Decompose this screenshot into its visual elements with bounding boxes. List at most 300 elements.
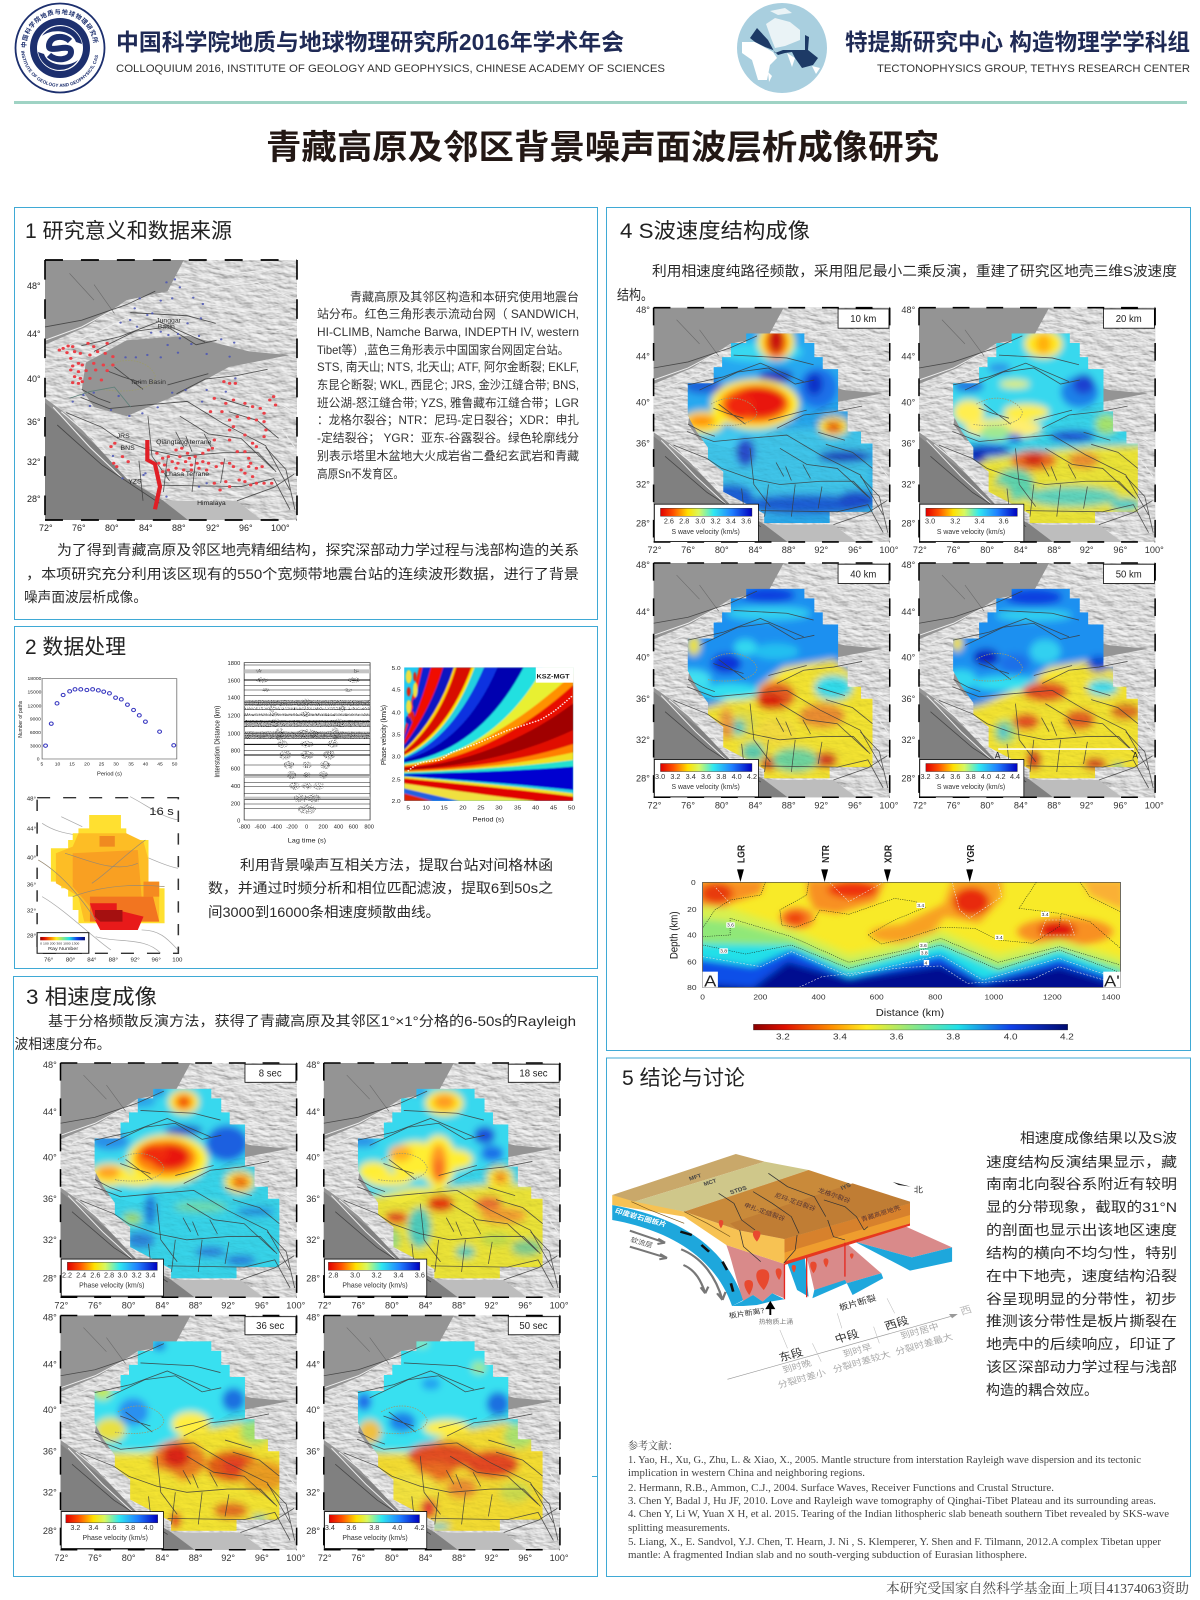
panel 3 heading: 3 相速度成像 (26, 986, 157, 1009)
path count scatter chart: 6000 (30, 730, 41, 735)
axis labels: 100° (286, 1299, 306, 1311)
cross-correlation record section: 600 (349, 825, 358, 831)
map axis labels: 80° (105, 523, 119, 533)
header: conference title (116, 29, 665, 75)
panel 2: data processing (14, 626, 598, 968)
colour legend: 4.4 (1010, 772, 1020, 781)
axis labels: 76° (681, 544, 695, 555)
black up-arrows (767, 1303, 774, 1315)
colour legend: 3.0 (925, 516, 935, 526)
section axes: 1200 (1043, 993, 1062, 1001)
axis labels: 92° (485, 1299, 499, 1311)
path count scatter chart: 25 (99, 762, 105, 767)
A / A' end labels: A (704, 972, 717, 990)
axis labels: 72° (318, 1299, 332, 1311)
colour legend: 3.4 (88, 1523, 98, 1532)
axis labels: 72° (647, 544, 662, 555)
axis labels: 76° (88, 1299, 102, 1311)
phase velocity map: 50 sec (306, 1314, 568, 1561)
colour legend: 3.0 (695, 516, 705, 526)
S velocity map: 20 km (902, 306, 1164, 553)
ray coverage map 16 s: 32° (27, 909, 36, 914)
right slab piece (854, 1225, 952, 1271)
map axis labels (27, 281, 290, 533)
map axis labels: 84° (139, 523, 153, 533)
axis labels: 84° (419, 1552, 433, 1563)
ray coverage map 16 s: 28° (27, 934, 36, 939)
references: implication in western China and neighboring regions. (628, 1468, 865, 1479)
axis labels: 76° (88, 1552, 102, 1563)
FTAN phase velocity image: 50 (568, 805, 576, 811)
depth label (508, 1064, 559, 1082)
diagram labels: 板片断离？ (728, 1305, 769, 1320)
panel 5 paragraph: 结构的横向不均匀性，特别 (986, 1245, 1177, 1261)
path count scatter chart: 12000 (28, 704, 42, 708)
colour legend: 3.6 (701, 772, 711, 781)
axis labels: 40° (636, 396, 650, 407)
colour legend: 3.6 (950, 772, 960, 781)
axis labels: 44° (43, 1106, 57, 1117)
panel 1 paragraph: ，本项研究充分利用该区现有的550个宽频带地震台站的连续波形数据，进行了背景 (26, 566, 579, 582)
phase velocity map: 36 sec (43, 1314, 305, 1561)
section axes: 200 (753, 993, 768, 1001)
colour legend (325, 1259, 427, 1296)
axis labels: 100° (286, 1552, 306, 1563)
cross-correlation record section: 600 (231, 767, 240, 772)
section axes: 60 (687, 958, 697, 966)
FTAN phase velocity image: 15 (440, 805, 448, 811)
header: institute logo (14, 2, 106, 94)
depth label (508, 1317, 559, 1335)
cross-correlation record section: -800 (239, 825, 250, 831)
map axis labels: 28° (27, 494, 41, 504)
ray coverage map 16 s: 76° (44, 958, 53, 963)
axis labels: 88° (782, 799, 796, 811)
axis labels: 92° (814, 799, 828, 811)
axis labels: 72° (54, 1552, 68, 1563)
section colour bar: 4.0 (1004, 1032, 1018, 1042)
contour value labels (719, 903, 1049, 965)
axis labels (901, 304, 1164, 555)
rift markers: NTR (820, 845, 831, 863)
crust block (612, 1154, 910, 1265)
axis labels: 80° (715, 799, 729, 811)
rift markers (736, 844, 976, 882)
ray number legend (37, 933, 89, 953)
axis labels (636, 304, 899, 555)
diagram labels: 青藏高原地壳 (860, 1203, 902, 1223)
map place labels: Basin (158, 324, 175, 331)
ray coverage map 16 s: 92° (131, 958, 140, 963)
panel 5 paragraph: 构造的耦合效应。 (986, 1382, 1098, 1398)
diagram labels: MCT (703, 1178, 718, 1188)
colour legend (920, 759, 1024, 797)
axis labels: 100° (550, 1552, 569, 1563)
axis labels: 32° (636, 734, 650, 745)
FTAN phase velocity image: 3.5 (392, 732, 401, 739)
cross-correlation record section: 800 (364, 825, 374, 831)
map caption text: 班公湖-怒江缝合带; YZS, 雅鲁藏布江缝合带；LGR (317, 395, 579, 410)
colour legend: 2.6 (664, 516, 674, 526)
axis labels: 92° (221, 1552, 235, 1563)
header: conference title: COLLOQUIUM 2016, INSTITUTE OF GEOLOGY AND GEOPHYSICS, CHINESE ACADEMY OF SCIENCES (116, 63, 665, 75)
panel 4: S wave velocity structure (606, 208, 1190, 1050)
cross-correlation record section: 400 (231, 784, 240, 790)
map caption text: HI-CLIMB, Namche Barwa, INDEPTH IV, western (317, 325, 579, 339)
panel 3 paragraph: 基于分格频散反演方法，获得了青藏高原及其邻区1°×1°分格的6-50s的Rayleigh (48, 1013, 576, 1029)
path count scatter chart: 3000 (30, 744, 41, 748)
section axes: Depth (km) (669, 911, 681, 959)
axis labels: 36° (43, 1193, 57, 1204)
diagram labels: 尼玛-定日裂谷 (773, 1191, 818, 1213)
mantle plume drops (719, 1220, 854, 1295)
ray coverage map 16 s: 16 s (149, 805, 174, 818)
panel 3 paragraph: 波相速度分布。 (14, 1036, 110, 1052)
diagram labels: 板片断裂 (837, 1292, 877, 1312)
axis labels: 36° (901, 693, 916, 704)
axis labels: 84° (155, 1552, 170, 1563)
section axes: 600 (870, 993, 884, 1001)
colour legend: 2.8 (104, 1270, 114, 1280)
section colour bar: 3.8 (946, 1032, 960, 1042)
path count scatter chart: 45 (157, 762, 163, 767)
panel 2 paragraph (208, 857, 553, 920)
FTAN phase velocity image: 2.0 (392, 798, 401, 805)
rift markers: LGR (736, 845, 747, 863)
path count scatter chart: 15000 (28, 690, 42, 694)
phase velocity map: 8 sec (43, 1062, 305, 1308)
cross-correlation record section: 1600 (228, 679, 240, 684)
cross-correlation record section: -600 (254, 825, 266, 831)
axis labels: 40° (43, 1404, 57, 1415)
references: 参考文献： (628, 1439, 678, 1452)
axis labels: 44° (636, 606, 650, 617)
header: research center title (845, 29, 1190, 75)
map axis labels: 44° (27, 329, 41, 339)
map axis labels: 76° (72, 523, 86, 533)
axis labels: 92° (485, 1552, 499, 1563)
axis labels: 80° (122, 1552, 136, 1563)
axis labels: 40° (636, 651, 650, 663)
colour legend: 4.0 (981, 772, 991, 781)
diagram labels: MFT (688, 1173, 703, 1182)
A / A' end labels: A' (1104, 972, 1120, 990)
colour legend: 3.0 (350, 1270, 360, 1280)
section axes: 0 (691, 878, 696, 887)
section colour bar (753, 1024, 1074, 1042)
axis labels: 40° (43, 1151, 57, 1163)
station map (27, 260, 297, 533)
colour legend: 3.6 (415, 1270, 425, 1280)
cross-correlation record section: Interstation Distance (km) (214, 706, 221, 778)
S velocity map: 50 km with profile A-A' (902, 562, 1164, 808)
axis labels: 84° (1014, 544, 1028, 555)
axis labels: 88° (189, 1299, 203, 1311)
colour legend (654, 504, 758, 542)
colour legend: 3.2 (711, 516, 721, 526)
panel 3 paragraph (14, 1013, 576, 1052)
depth label: 8 sec (259, 1068, 282, 1080)
colour legend: 2.8 (679, 516, 689, 526)
colour legend: 3.8 (716, 772, 726, 781)
diagram labels: STDS (729, 1185, 748, 1196)
map axis labels: 40° (27, 374, 41, 384)
diagram labels: 印度岩石圈板片 (614, 1206, 668, 1229)
profile line A-A' (995, 749, 1140, 760)
axis labels: 28° (43, 1525, 57, 1536)
diagram labels (614, 1173, 902, 1326)
diagram labels: 软流层 (629, 1235, 654, 1250)
axis labels: 88° (452, 1299, 466, 1311)
A / A' end labels (703, 972, 1120, 990)
path count scatter chart: 35 (128, 762, 134, 767)
north arrow (893, 1182, 923, 1195)
section axes: 80 (687, 983, 697, 992)
depth label: 40 km (850, 569, 876, 581)
axis labels: 48° (901, 559, 916, 570)
profile line A-A': A (995, 750, 1001, 760)
axis labels: 80° (122, 1299, 136, 1311)
axis labels (901, 559, 1164, 811)
map caption text (317, 289, 579, 481)
axis labels: 100° (550, 1299, 569, 1311)
cross-correlation record section: 800 (231, 749, 240, 755)
references: 1. Yao, H., Xu, G., Zhu, L. & Xiao, X., 2005. Mantle structure from interstation Rayleigh wave dispersion and its tectonic (628, 1455, 1141, 1466)
axis labels: 96° (518, 1552, 532, 1563)
axis labels: 48° (43, 1059, 57, 1070)
panel 2 heading: 2 数据处理 (25, 636, 126, 659)
colour legend: 2.2 (62, 1270, 72, 1280)
rift markers: YGR (965, 844, 976, 863)
subducting Indian slab (612, 1205, 784, 1306)
colour legend: 3.8 (125, 1523, 135, 1532)
axis labels: 32° (901, 734, 916, 745)
FTAN phase velocity image: 4.0 (392, 710, 401, 716)
map axis labels: 36° (27, 417, 41, 427)
map caption text: 东昆仑断裂; WKL, 西昆仑; JRS, 金沙江缝合带; BNS, (317, 377, 579, 392)
axis labels: 28° (306, 1272, 320, 1284)
axis labels: 92° (814, 544, 828, 555)
axis labels: 96° (255, 1552, 269, 1563)
colour legend (654, 759, 758, 797)
axis labels: 96° (1113, 799, 1128, 811)
references: 4. Chen Y, Li W, Yuan X H, et al. 2015. Tearing of the Indian lithospheric slab beneath southern Tibet revealed by SKS-wave (628, 1509, 1169, 1520)
depth label (838, 564, 889, 583)
colour legend: S wave velocity (km/s) (671, 529, 740, 536)
panel 1 paragraph (24, 542, 579, 605)
colour legend: 3.6 (999, 516, 1009, 526)
axis labels: 32° (636, 478, 650, 490)
section axes (669, 878, 1121, 1019)
diagram labels: 热物质上涌 (759, 1317, 793, 1326)
map caption text: 高原Sn不发育区。 (317, 466, 404, 481)
axis labels: 32° (306, 1486, 320, 1498)
section axes: 40 (687, 931, 697, 940)
section axes: 800 (928, 993, 943, 1001)
colour legend: 3.6 (741, 516, 751, 526)
axis labels: 36° (901, 438, 916, 449)
ray coverage map 16 s: 48° (27, 797, 36, 803)
axis labels: 80° (980, 799, 994, 811)
depth label (1103, 309, 1154, 328)
ray number legend: Ray Number (48, 946, 79, 952)
main title: 青藏高原及邻区背景噪声面波层析成像研究 (266, 129, 939, 167)
axis labels: 84° (749, 544, 763, 555)
panel 2 paragraph: 数，并通过时频分析和相位匹配滤波，提取6到50s之 (208, 880, 553, 896)
path count scatter chart (18, 676, 178, 777)
panel 5 paragraph (986, 1130, 1177, 1398)
colour legend: 4.0 (392, 1523, 402, 1532)
axis labels: 44° (901, 606, 916, 617)
axis labels: 28° (636, 517, 650, 528)
ray coverage map 16 s: 96° (152, 958, 161, 963)
panel 5 paragraph: 显的分带现象，截取的31°N (986, 1199, 1177, 1215)
depth label: 36 sec (256, 1321, 284, 1332)
axis labels: 40° (306, 1404, 320, 1415)
colour legend: 3.4 (686, 772, 696, 781)
depth label: 18 sec (519, 1068, 548, 1080)
references: 2. Hermann, R.B., Ammon, C.J., 2004. Surface Waves, Receiver Functions and Crustal Structure. (628, 1483, 1054, 1494)
axis labels: 80° (385, 1552, 399, 1563)
axis labels: 48° (306, 1059, 320, 1070)
axis labels: 88° (189, 1552, 203, 1563)
colour legend: 3.4 (935, 772, 945, 781)
section colour bar: 4.2 (1060, 1032, 1074, 1042)
header: institute logo: 中国科学院地质与地球物理研究所 (20, 8, 99, 48)
map caption text: ：龙格尔裂谷；NTR：尼玛-定日裂谷；XDR：申扎 (317, 412, 579, 427)
colour legend (920, 504, 1024, 542)
map caption text: 站分布。红色三角形表示流动台网（ SANDWICH, (317, 306, 579, 321)
axis labels: 96° (1113, 544, 1128, 555)
depth label (838, 309, 889, 328)
map place labels: YZS (128, 479, 142, 485)
diagram labels: 龙格尔裂谷 (817, 1186, 853, 1205)
colour legend (325, 1512, 427, 1549)
axis labels: 40° (901, 651, 916, 663)
path count scatter chart: 50 (172, 762, 178, 767)
axis labels: 84° (419, 1299, 433, 1311)
rift markers: XDR (883, 845, 894, 863)
axis labels: 96° (848, 544, 862, 555)
axis labels: 76° (351, 1552, 365, 1563)
ray coverage map 16 s: 84° (87, 958, 97, 963)
panel 5 paragraph: 相速度成像结果以及S波 (1020, 1130, 1177, 1146)
along-strike section axis: 分裂时差小 (776, 1367, 828, 1390)
map caption text: 别表示塔里木盆地大火成岩省二叠纪玄武岩和青藏 (317, 448, 579, 463)
axis labels: 44° (901, 350, 916, 362)
depth label (245, 1064, 296, 1082)
colour legend: S wave velocity (km/s) (937, 784, 1005, 791)
axis labels: 32° (306, 1234, 320, 1245)
axis labels: 72° (647, 799, 662, 811)
blue station clusters (73, 279, 235, 497)
tectonic block diagram (612, 1154, 974, 1390)
panel 1: research significance and data (14, 208, 598, 620)
map axis labels: 88° (172, 523, 186, 533)
ray coverage map 16 s: 44° (27, 827, 36, 833)
colour legend: 3.2 (950, 516, 960, 526)
colour legend: 3.2 (670, 772, 680, 781)
axis labels: 76° (947, 799, 961, 811)
section axes: 0 (700, 993, 706, 1001)
axis labels: 84° (1014, 799, 1028, 811)
FTAN phase velocity image: Period (s) (473, 817, 504, 823)
axis labels: 44° (43, 1358, 57, 1369)
diagram labels: IYS (840, 1182, 852, 1192)
axis labels: 84° (155, 1299, 170, 1311)
axis labels: 80° (715, 544, 729, 555)
contour value labels: 3.6 (727, 923, 734, 928)
FTAN phase velocity image: 40 (532, 805, 540, 811)
along-strike section axis: 到时居中 (899, 1321, 940, 1341)
along-strike section axis: 西 (959, 1304, 974, 1318)
axis labels (43, 1059, 306, 1311)
ray number legend: 0 100 200 300 1000 1300 (40, 942, 80, 946)
path count scatter chart: 0 (37, 757, 40, 762)
cross-correlation record section (214, 661, 374, 845)
red dense linear array (147, 440, 160, 509)
map place labels (117, 318, 226, 507)
colour legend: Phase velocity (km/s) (342, 1282, 408, 1290)
map caption text: 青藏高原及其邻区构造和本研究使用地震台 (350, 289, 579, 304)
ray coverage map 16 s: 88° (109, 958, 118, 963)
colour legend: 4.0 (143, 1523, 154, 1532)
path count scatter chart: Number of paths (18, 701, 24, 738)
colour legend: 3.6 (346, 1523, 356, 1532)
FTAN phase velocity image: 3.0 (392, 754, 401, 760)
depth label: 20 km (1116, 314, 1142, 325)
axis labels: 40° (306, 1151, 320, 1163)
cross-correlation record section: 1400 (228, 696, 240, 701)
colour legend (61, 1259, 163, 1296)
colour legend: 3.4 (726, 516, 736, 526)
axis labels: 80° (980, 544, 994, 555)
axis labels: 76° (681, 799, 695, 811)
axis labels: 96° (518, 1299, 532, 1311)
axis labels: 100° (1145, 544, 1164, 555)
path count scatter chart: 15 (69, 762, 75, 767)
axis labels: 72° (54, 1299, 68, 1311)
contour value labels: 3.8 (720, 949, 728, 954)
axis labels: 36° (43, 1445, 57, 1457)
path count scatter chart: 18000 (28, 676, 42, 681)
panel 1 paragraph: 噪声面波层析成像。 (24, 589, 147, 605)
colour legend: 3.4 (393, 1270, 403, 1280)
FTAN phase velocity image: 5.0 (392, 665, 401, 672)
FTAN phase velocity image: 30 (495, 805, 503, 811)
colour legend: 3.4 (974, 516, 985, 526)
axis labels: 96° (848, 799, 862, 811)
fault lines through crust and slab (784, 1243, 845, 1299)
along-strike section axis: 到时晚 (781, 1357, 813, 1375)
cross-correlation record section: -400 (271, 825, 282, 831)
axis labels: 28° (901, 772, 916, 784)
axis labels: 48° (636, 559, 650, 570)
along-strike section axis: 分裂时差最大 (894, 1331, 954, 1357)
map axis labels: 96° (239, 523, 253, 533)
map place labels: JRS (117, 433, 130, 440)
profile line A-A': A' (1133, 750, 1140, 760)
axis labels: 28° (636, 772, 650, 784)
depth label (245, 1317, 296, 1335)
panel 4 paragraph (617, 263, 1177, 303)
colour legend: 3.0 (655, 772, 665, 781)
along-strike section axis: 西段 (883, 1314, 911, 1333)
axis labels (636, 559, 899, 811)
diagram labels: 申扎-定结裂谷 (743, 1201, 787, 1223)
colour legend: Phase velocity (km/s) (342, 1535, 408, 1542)
colour legend: 3.2 (372, 1270, 382, 1280)
